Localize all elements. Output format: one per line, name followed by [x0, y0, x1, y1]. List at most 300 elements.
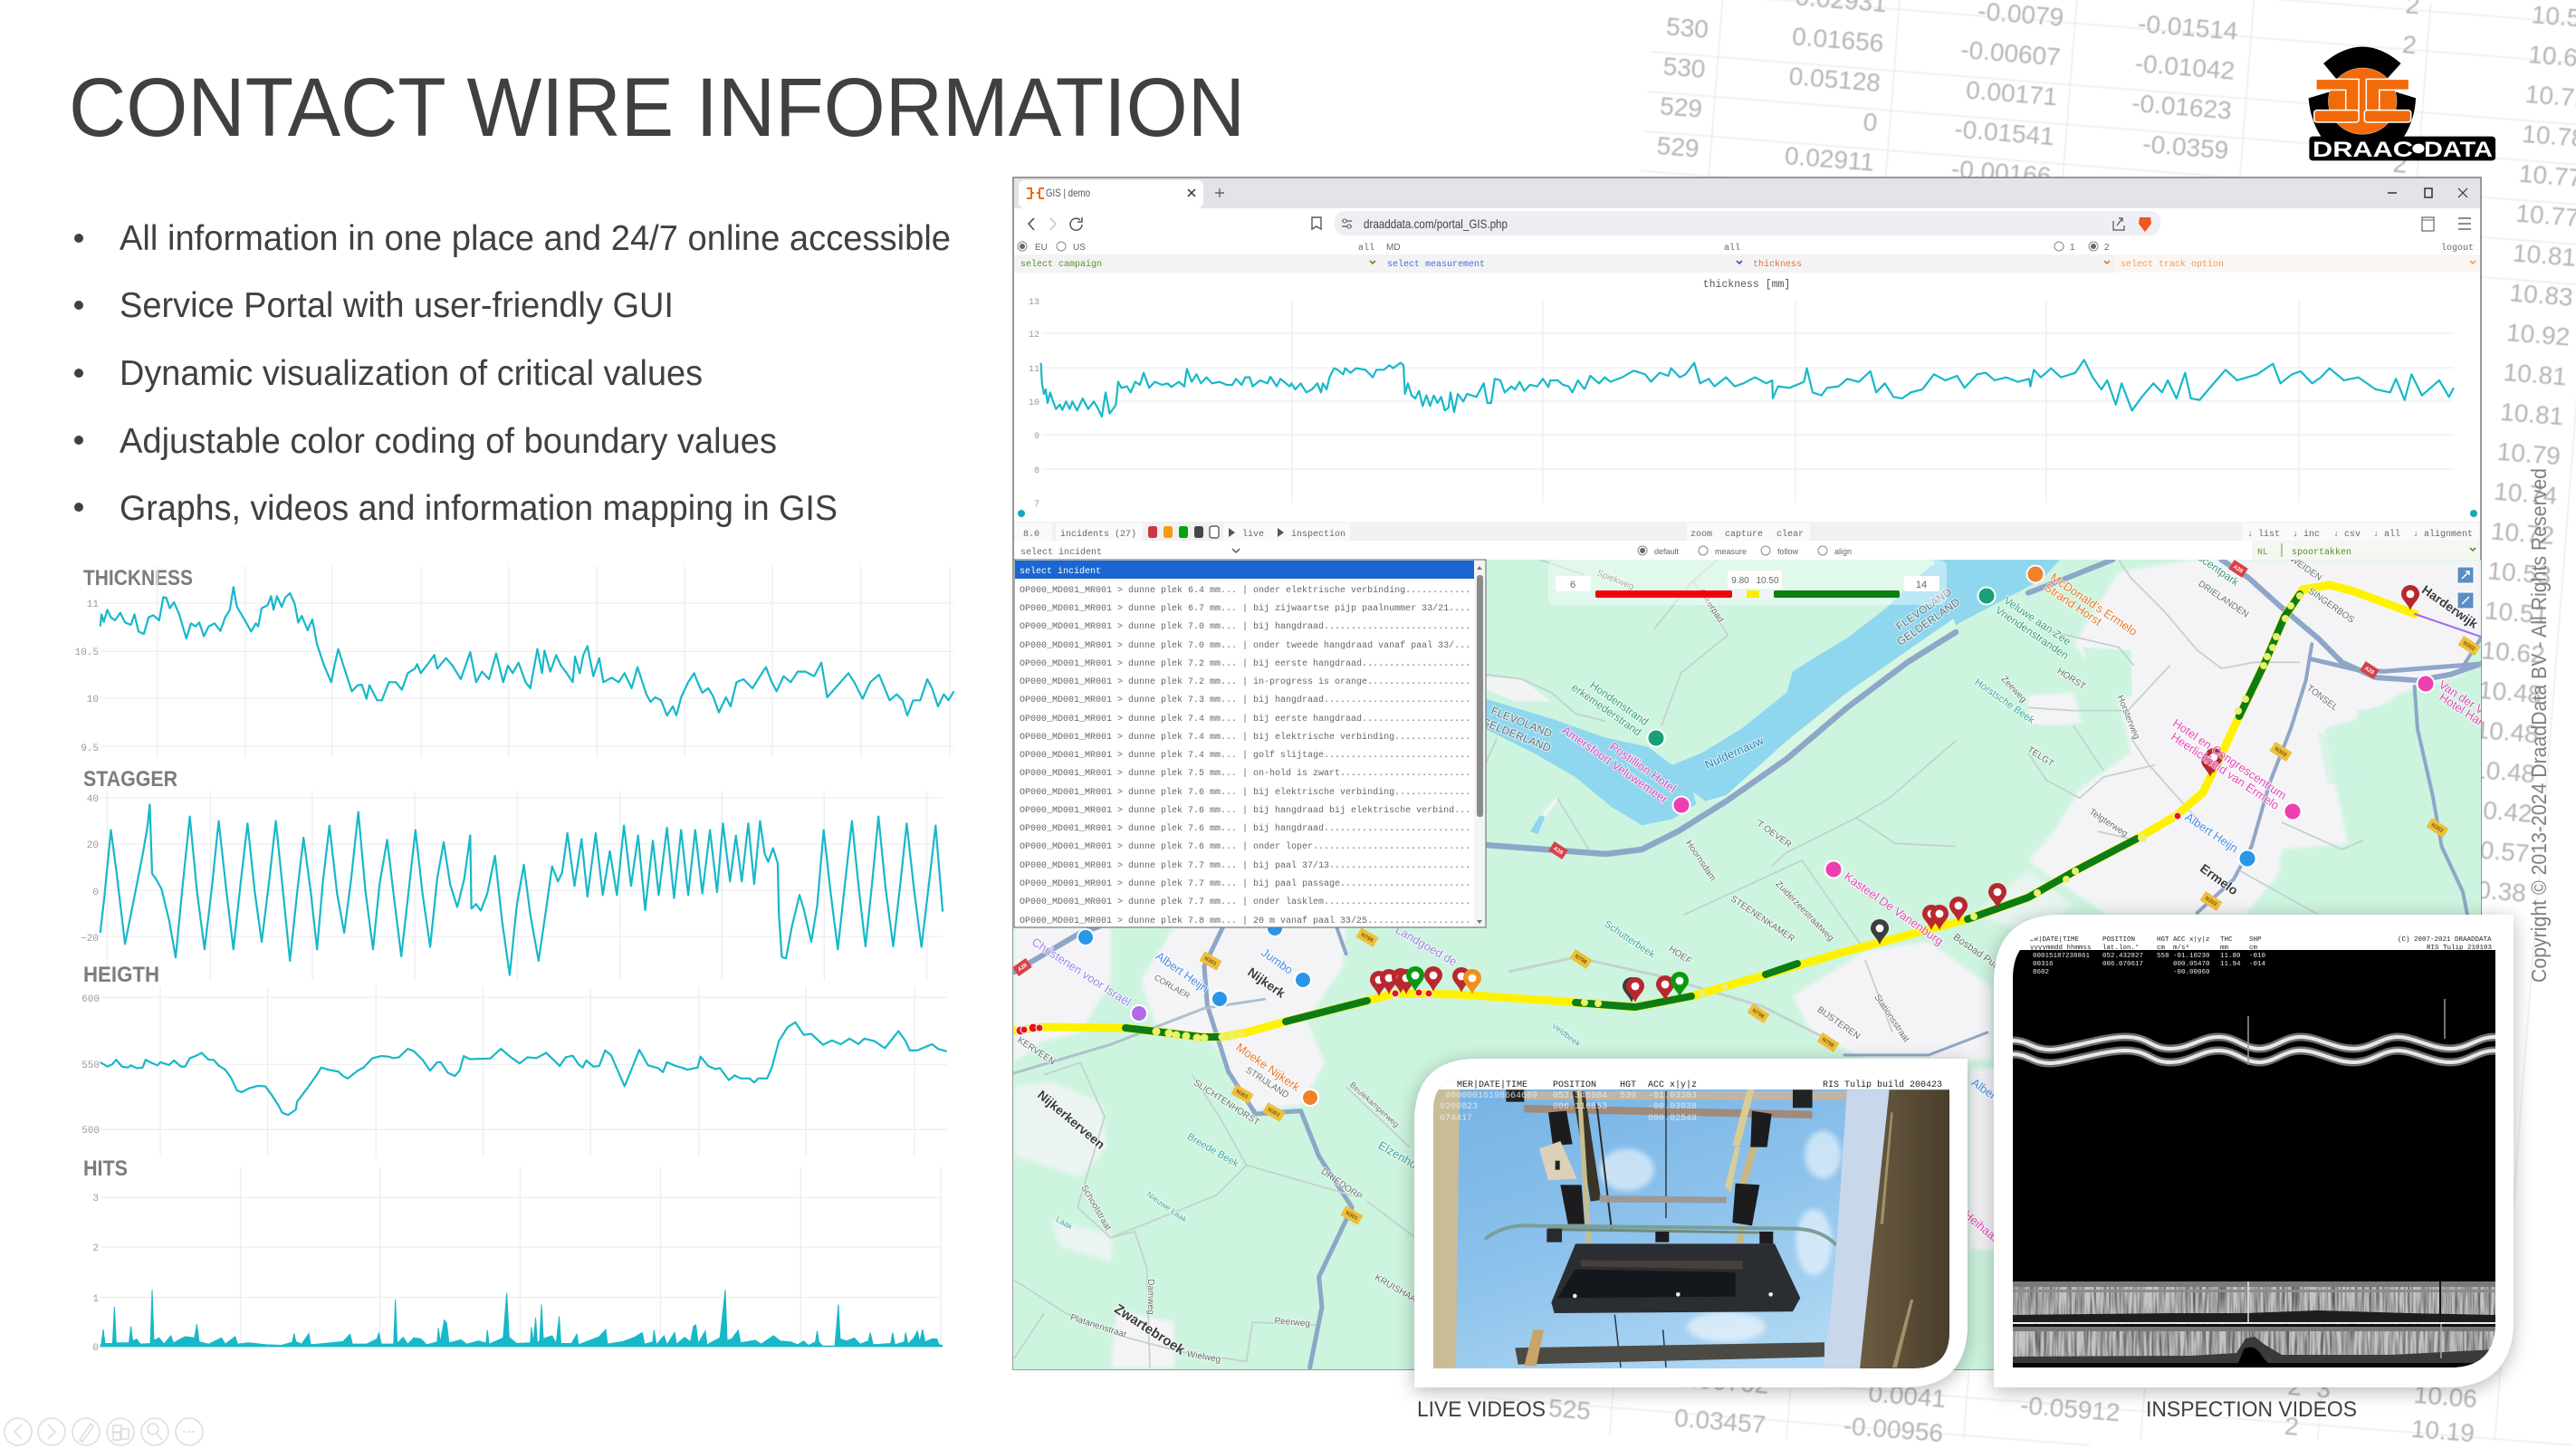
portal selector rows: US [1073, 243, 1086, 253]
map: road shields: A28 [2232, 564, 2244, 575]
toolbar: incidents and downloads: ↓ csv [2333, 530, 2361, 540]
map [1012, 542, 2517, 1369]
chart: heigth: 600 [81, 994, 100, 1005]
map: place labels: Harderwijk [2419, 582, 2481, 631]
chart: heigth: HEIGTH [83, 963, 159, 987]
dropdown rows: OP000_MD001_MR001 > dunne plek 7.2 mm... | in-progress is orange................... [1020, 677, 1470, 687]
panel: browser window [1012, 178, 2517, 1369]
contact wire waves [2013, 999, 2495, 1065]
bullet list: Adjustable color coding of boundary values [120, 422, 777, 461]
inspection video frame: 006.070617 [2102, 961, 2143, 968]
background spreadsheet: -0.01042 [2134, 49, 2236, 85]
map: place labels: Schutterbeek [1602, 918, 1657, 961]
map: place labels: Horsterweg [2115, 694, 2141, 741]
background spreadsheet: 10.57 [2465, 834, 2531, 868]
chart: main thickness graph: 12 [1029, 331, 1039, 341]
background spreadsheet: 10.81 [2503, 358, 2568, 390]
background spreadsheet: 529 [1659, 91, 1703, 123]
chart: main thickness graph: 13 [1029, 298, 1039, 308]
dropdown rows [1020, 585, 1470, 926]
chart: stagger: 0 [92, 888, 99, 898]
inspection video frame: ER|DATE|TIME [2030, 936, 2080, 944]
dropdown rows: OP000_MD001_MR001 > dunne plek 7.6 mm... | onder loper............................. [1020, 841, 1470, 852]
incident dropdown list: select incident [1020, 566, 1101, 577]
map: place labels: Wielweg [1186, 1349, 1221, 1365]
map: route line coloured by thickness [1014, 585, 2481, 1037]
map: road shields: N798 [1751, 1008, 1766, 1021]
map: place labels: Bosbad Putten [1951, 932, 2011, 978]
map: urban areas [1014, 560, 2481, 1367]
inspection video frame: 052.432827 [2102, 953, 2143, 960]
map: place labels: Peerweg [1274, 1316, 1310, 1329]
portal selector rows: select measurement [1387, 259, 1485, 270]
dropdown rows: OP000_MD001_MR001 > dunne plek 7.6 mm... | bij hangdraad........................... [1020, 823, 1470, 834]
map: place labels: HORST [2055, 667, 2087, 692]
toolbar: incidents and downloads: measure [1715, 547, 1747, 556]
toolbar: incidents and downloads: select incident [1020, 547, 1102, 558]
live video frame: POSITION [1553, 1080, 1596, 1090]
map: place labels: Hotel Harderwijk [2437, 690, 2517, 749]
background spreadsheet: 0.0041 [1867, 1379, 1947, 1413]
toolbar: incidents and downloads: clear [1776, 529, 1804, 540]
map: place labels: Nijkerkerveen [1035, 1088, 1108, 1152]
map: place labels: Nieuwe Laak [1145, 1190, 1189, 1224]
map: place labels: Christenen voor Israël [1029, 935, 1134, 1009]
background spreadsheet: 525 [1547, 1394, 1592, 1425]
presentation control icons [5, 1418, 203, 1445]
chart: heigth: 550 [81, 1060, 100, 1071]
map: road shields: N301 [1345, 1211, 1359, 1222]
map: place labels: STRIJLAND [1244, 1065, 1290, 1100]
map: place labels: Zuiderzeestraatweg [1773, 879, 1835, 944]
inspection video frame: m/s² [2173, 944, 2189, 952]
map: place labels: FLEVOLAND [1893, 585, 1954, 633]
background spreadsheet: 10.51 [2484, 596, 2549, 629]
background spreadsheet: -0.00166 [1950, 155, 2053, 190]
chart: hits: HITS [83, 1156, 128, 1181]
live video frame: -00.03938 [1648, 1102, 1697, 1112]
logo: DraadData: DRAAC [2313, 138, 2413, 162]
map: place labels [1015, 542, 2517, 1365]
map: place labels: Van der Valk [2437, 677, 2499, 725]
inspection video frame: POSITION [2102, 936, 2135, 944]
inspection video frame: 11.80 [2220, 953, 2241, 960]
live video frame: RIS Tulip build 200423 [1823, 1080, 1942, 1090]
toolbar: incidents and downloads: 8.0 [1023, 530, 1039, 540]
map: place labels: Damweg [1145, 1279, 1155, 1315]
map: points of interest [1077, 565, 2434, 1106]
background spreadsheet: 0.00702 [1677, 1364, 1770, 1399]
inspection video frame: 00316 [2033, 961, 2054, 968]
map: place labels: Laak [1055, 1214, 1075, 1232]
background spreadsheet: 10.81 [2512, 238, 2576, 272]
map: road shields: A28 [2363, 666, 2375, 677]
background spreadsheet: 10.92 [2505, 318, 2571, 351]
inspection video frame: -014 [2249, 961, 2266, 968]
map: place labels: SLICHTENHORST [1192, 1078, 1261, 1128]
chart: thickness [75, 566, 953, 758]
map: thickness range slider: 10.50 [1756, 576, 1779, 586]
map: place labels: DRIELANDEN [2197, 579, 2250, 620]
background spreadsheet: 10.42 [2468, 795, 2533, 828]
map: thickness range slider: 6 [1570, 580, 1575, 590]
background spreadsheet: 530 [1662, 52, 1707, 83]
background spreadsheet: 10.48 [2471, 755, 2536, 788]
portal selector rows: select track option [2121, 259, 2224, 270]
map: place labels: 'T OEVER [1754, 818, 1793, 850]
map: place labels: Ankerpad [1696, 587, 1725, 625]
portal selector rows: select campaign [1020, 259, 1102, 270]
toolbar: incidents and downloads: ↓ alignment [2413, 529, 2473, 540]
bullet list: Service Portal with user-friendly GUI [120, 286, 674, 325]
map: place labels: Hotel en Congrescentrum [2170, 716, 2289, 802]
background spreadsheet: 0 [1863, 108, 1879, 137]
inspection video frame: cm [2157, 945, 2166, 952]
map: place labels: Albert Heijn [1154, 949, 1211, 995]
map: lake and A28 [1485, 560, 1956, 866]
background spreadsheet: 10.38 [2462, 874, 2527, 907]
map: place labels: BIJSTEREN [1815, 1005, 1862, 1041]
toolbar: incidents and downloads: align [1834, 547, 1852, 556]
chart: hits: 1 [92, 1294, 99, 1305]
map: road shields: N302 [2430, 822, 2445, 835]
map: road shields: N798 [1821, 1037, 1835, 1050]
background spreadsheet: 10.72 [2490, 517, 2555, 550]
chart: stagger: 20 [87, 840, 99, 851]
map: road shields: N302 [2462, 640, 2476, 653]
chart: main thickness graph: 7 [1034, 500, 1039, 510]
map: place labels: Horstsche Beek [1972, 677, 2036, 726]
background spreadsheet: 10.79 [2496, 437, 2562, 470]
map: place labels: Heerlickheid van Ermelo [2169, 730, 2282, 812]
dropdown rows: OP000_MD001_MR001 > dunne plek 7.7 mm... | onder lasklem........................... [1020, 897, 1470, 907]
toolbar: incidents and downloads: follow [1777, 547, 1799, 556]
map: road shields: A28 [1017, 963, 1029, 973]
portal selector rows: thickness [1753, 259, 1802, 270]
chart: hits: 3 [92, 1194, 99, 1204]
bullet list [74, 219, 951, 528]
logo: DraadData [2309, 47, 2495, 162]
background spreadsheet: 10.81 [2499, 398, 2564, 430]
map: place labels: Veldbeek [1550, 1021, 1583, 1049]
portal selector rows: all [1724, 243, 1740, 254]
toolbar: incidents and downloads: zoom [1690, 530, 1712, 540]
background spreadsheet: 530 [1665, 12, 1709, 43]
inspection video frame: (C) 2007-2021 DRAADDATA [2398, 936, 2492, 944]
dropdown rows: OP000_MD001_MR001 > dunne plek 7.7 mm... | bij paal 37/13.......................... [1020, 860, 1470, 871]
map: place labels: HOEF [1667, 945, 1693, 966]
inspection video frame: yyyymmdd hhmmss [2030, 945, 2092, 952]
map: place labels: GELDERLAND [1480, 715, 1553, 754]
map: place labels: Zwartebroek [1111, 1301, 1188, 1358]
toolbar: incidents and downloads: inspection [1291, 529, 1345, 540]
inspection video frame: HGT [2157, 936, 2169, 944]
background spreadsheet: 0.03457 [1673, 1404, 1767, 1439]
map: place labels: KERVEEN [1015, 1035, 1057, 1067]
live video frame: 052.346984 [1553, 1091, 1607, 1101]
title: CONTACT WIRE INFORMATION [69, 62, 1245, 154]
inspection video frame: -010 [2249, 953, 2266, 960]
background spreadsheet: 2 [2287, 1372, 2303, 1401]
chart: stagger: 40 [87, 794, 99, 805]
map: incident pins [1370, 585, 2419, 1003]
dropdown rows: OP000_MD001_MR001 > dunne plek 7.4 mm... | golf slijtage........................... [1020, 750, 1470, 761]
map: east roads [2028, 560, 2481, 915]
background spreadsheet: 529 [1656, 131, 1700, 163]
background spreadsheet: -0.00956 [1843, 1411, 1944, 1447]
background spreadsheet: 0.05128 [1788, 62, 1882, 97]
portal selector rows: all [1358, 243, 1374, 254]
background spreadsheet: -0.0359 [2141, 130, 2229, 164]
toolbar: incidents and downloads: incidents (27) [1060, 529, 1136, 540]
background spreadsheet: 0.01656 [1791, 22, 1885, 57]
inspection video frame: SHP [2249, 936, 2262, 944]
portal selector rows [1014, 242, 2480, 273]
background spreadsheet: 2 [2284, 1412, 2300, 1441]
browser toolbar: draaddata.com/portal_GIS.php [1364, 216, 1508, 231]
chart: stagger [81, 767, 943, 981]
chart: thickness: 10.5 [75, 648, 99, 658]
map: place labels: Landgoed de [1393, 923, 1460, 969]
inspection video frame [2013, 934, 2495, 1367]
toolbar: incidents and downloads: NL [2257, 548, 2268, 558]
map: place labels: Hondenstrand [1587, 678, 1651, 728]
map: place labels: McDonald's Ermelo [2048, 571, 2140, 638]
map: route markers [1016, 592, 2303, 1041]
map: place labels: Moeke Nijkerk [1234, 1041, 1303, 1094]
map: place labels: Vriendenstranden [1993, 604, 2071, 662]
toolbar: incidents and downloads [1014, 522, 2480, 560]
map: place labels: Veluwe aan Zee [2002, 594, 2073, 648]
chart: main thickness graph: 10 [1029, 398, 1039, 408]
chart: main thickness graph: 11 [1029, 365, 1039, 375]
live video frame: HGT [1620, 1080, 1636, 1090]
map: place labels: Nuldernauw [1702, 734, 1766, 772]
map: thickness range slider: 9.80 [1731, 576, 1749, 586]
map: place labels: Jumbo [1259, 945, 1296, 977]
inspection video frame: ACC x|y|z [2173, 936, 2210, 944]
toolbar: incidents and downloads: default [1654, 547, 1680, 556]
inspection video frame: 000.05470 [2173, 961, 2210, 968]
dropdown rows: OP000_MD001_MR001 > dunne plek 6.4 mm... | onder elektrische verbinding............ [1020, 585, 1470, 596]
map: place labels: erkemederstrand [1569, 681, 1643, 738]
map: road shields: N798 [1360, 933, 1374, 944]
map: place labels: DRIEDORP [1319, 1166, 1364, 1203]
wire wear strip [2013, 1281, 2495, 1367]
chart: main thickness graph: 9 [1034, 432, 1039, 442]
chart: hits: 2 [92, 1243, 99, 1254]
background spreadsheet: -0.00607 [1959, 35, 2062, 72]
map: road shields: N303 [2274, 746, 2288, 759]
inspection video frame: cm [2249, 945, 2258, 952]
map: place labels: WEIDEN [2288, 554, 2323, 583]
chart: main thickness graph: thickness [mm] [1703, 279, 1790, 291]
background spreadsheet: -0.05912 [2019, 1391, 2121, 1426]
map: place labels: TELGT [2025, 745, 2055, 769]
toolbar: incidents and downloads: live [1242, 529, 1264, 540]
dropdown rows: OP000_MD001_MR001 > dunne plek 7.6 mm... | bij hangdraad bij elektrische verbind... [1020, 805, 1470, 816]
map: thickness range slider: 14 [1916, 580, 1927, 590]
map: place labels: TONSEL [2304, 684, 2340, 714]
chart: hits [83, 1156, 942, 1354]
background spreadsheet: 10.19 [2410, 1415, 2475, 1447]
dropdown rows: OP000_MD001_MR001 > dunne plek 7.4 mm... | bij eerste hangdraad.................... [1020, 714, 1470, 724]
inspection video frame: RIS Tulip 210103 [2427, 945, 2493, 952]
map: place labels: Elzenhof [1376, 1138, 1422, 1173]
inspection video frame: -00.00060 [2173, 969, 2210, 976]
background spreadsheet: 10.62 [2480, 636, 2546, 669]
dropdown rows: OP000_MD001_MR001 > dunne plek 7.0 mm... | onder tweede hangdraad vanaf paal 33/... [1020, 640, 1470, 651]
map: place labels: GELDERLAND [1894, 595, 1962, 648]
map: place labels: SINGERBOS [2306, 586, 2356, 626]
portal selector rows: MD [1386, 243, 1401, 253]
dropdown rows: OP000_MD001_MR001 > dunne plek 6.7 mm... | bij zijwaartse pijp paalnummer 33/21.... [1020, 603, 1470, 614]
map: central roads [1485, 860, 1987, 1204]
chart: main thickness graph: 8 [1034, 466, 1039, 476]
chart: heigth [81, 963, 947, 1156]
map: place labels: Platanenstraat [1068, 1312, 1127, 1340]
portal selector rows: 2 [2104, 243, 2110, 253]
background spreadsheet: 0.02911 [1784, 141, 1875, 177]
chart: thickness: 11 [87, 600, 99, 610]
inspection video frame: THC [2220, 936, 2233, 944]
chart: stagger: STAGGER [83, 767, 177, 792]
map: road shields: A28 [1552, 846, 1564, 857]
map: thickness range slider [1548, 560, 1947, 605]
map: place labels: Strand Horst [2042, 581, 2104, 629]
background spreadsheet [1483, 0, 2576, 1449]
map: place labels: Beulekamperweg [1348, 1080, 1401, 1129]
background spreadsheet: 2 [2401, 30, 2418, 59]
inspection video frame: lat.lon.° [2102, 944, 2140, 952]
inspection video frame: 8602 [2033, 969, 2049, 976]
map: place labels: Spiekweg [1595, 568, 1635, 592]
inspection video frame: 00015187238861 [2033, 953, 2091, 960]
background spreadsheet: -0.01623 [2131, 89, 2233, 125]
background spreadsheet: 0.00171 [1965, 76, 2058, 110]
portal selector rows: logout [2441, 243, 2474, 254]
map: place labels: Postillion Hotel [1607, 740, 1679, 795]
map: road shields: N301 [1235, 1089, 1250, 1100]
map: road shields: N301 [1267, 1108, 1281, 1118]
inspection video frame: mm [2220, 945, 2229, 952]
live video frame: 00000016198664669 [1445, 1091, 1537, 1101]
background spreadsheet: 2 [2392, 149, 2408, 178]
background spreadsheet: -0.01514 [2137, 9, 2239, 45]
toolbar: incidents and downloads: ↓ list [2247, 529, 2280, 540]
inspection video frame: -01.10230 [2173, 953, 2210, 960]
map: place labels: Zeeweg [1999, 675, 2028, 705]
background spreadsheet: 10.83 [2509, 278, 2574, 312]
bullet list: Dynamic visualization of critical values [120, 354, 703, 393]
portal selector rows: 1 [2070, 243, 2075, 253]
live video frame: ACC x|y|z [1648, 1080, 1697, 1090]
map: place labels: Albert Heijn [2182, 810, 2241, 855]
map: place labels: Heihaas [1961, 1207, 2003, 1246]
background spreadsheet: 10.06 [2413, 1380, 2478, 1413]
live video frame: MER|DATE|TIME [1457, 1080, 1527, 1090]
caption: inspection videos: INSPECTION VIDEOS [2146, 1397, 2357, 1422]
map: place labels: FLEVOLAND [1489, 704, 1555, 740]
live video frame: 074417 [1440, 1114, 1472, 1124]
chart: hits: 0 [92, 1343, 99, 1354]
map: road shields: N301 [1203, 956, 1218, 967]
chart: thickness: THICKNESS [83, 566, 193, 590]
inspection video frame: 558 [2157, 953, 2169, 960]
logo: DraadData: DATA [2424, 138, 2493, 162]
live video frame: 539 [1620, 1091, 1636, 1101]
dropdown rows: OP000_MD001_MR001 > dunne plek 7.2 mm... | bij eerste hangdraad.................... [1020, 658, 1470, 669]
chart: thickness: 10 [87, 695, 99, 705]
map: road shields: N303 [2204, 896, 2218, 908]
panel: live video card [1414, 1059, 1968, 1387]
map: west roads [1014, 926, 1415, 1367]
dropdown rows: OP000_MD001_MR001 > dunne plek 7.4 mm... | bij elektrische verbinding.............. [1020, 732, 1470, 743]
background spreadsheet: -0.01541 [1953, 115, 2055, 150]
live video frame: 006.116853 [1553, 1102, 1607, 1112]
dropdown rows: OP000_MD001_MR001 > dunne plek 7.5 mm... | on-hold is zwart........................ [1020, 768, 1470, 779]
browser tab bar: GIS | demo [1046, 187, 1090, 199]
toolbar: incidents and downloads: ↓ all [2373, 529, 2400, 540]
live video frame: -01.03383 [1648, 1091, 1697, 1101]
live video frame: 0200823 [1440, 1102, 1478, 1112]
background spreadsheet: 10.53 [2486, 556, 2552, 590]
toolbar: incidents and downloads: spoortakken [2292, 547, 2351, 558]
copyright: Copyright © 2013-2024 DraadData BV - All Rights Reserved [2527, 468, 2551, 983]
chart: thickness: 9.5 [81, 744, 99, 754]
map: place labels: CORLAER [1153, 973, 1192, 1001]
panel: inspection video card [1994, 915, 2514, 1387]
portal selector rows: EU [1035, 243, 1048, 253]
map: place labels: Albert [1968, 1075, 2002, 1104]
map: green park inclusions [2028, 648, 2406, 789]
chart: stagger: −20 [81, 934, 99, 945]
dropdown rows: OP000_MD001_MR001 > dunne plek 7.3 mm... | bij hangdraad........................... [1020, 695, 1470, 705]
chart: heigth: 500 [81, 1126, 100, 1137]
map: road shields: N798 [1574, 954, 1588, 966]
map: place labels: Breede Beek [1185, 1131, 1240, 1170]
map: place labels: STEENENKAMER [1729, 894, 1796, 945]
map: place labels: Telgterweg [2087, 807, 2130, 840]
map: place labels: Kasteel De Vanenburg [1842, 869, 1946, 948]
live video frame: 000.02549 [1648, 1114, 1697, 1124]
map: place labels: Stationsstraat [1872, 993, 1911, 1044]
dropdown rows: OP000_MD001_MR001 > dunne plek 7.6 mm... | bij elektrische verbinding.............. [1020, 787, 1470, 798]
background spreadsheet: 10.74 [2493, 477, 2559, 510]
dropdown rows: OP000_MD001_MR001 > dunne plek 7.7 mm... | bij paal passage........................ [1020, 878, 1470, 889]
toolbar: incidents and downloads: capture [1725, 530, 1763, 540]
map: place labels: Nijkerk [1245, 964, 1288, 1001]
chart: main thickness graph [1018, 279, 2477, 517]
browser toolbar [1014, 208, 2480, 238]
incident dropdown list [1014, 560, 1486, 927]
dropdown rows: OP000_MD001_MR001 > dunne plek 7.0 mm... | bij hangdraad........................... [1020, 621, 1470, 632]
background spreadsheet: 10.48 [2477, 676, 2542, 708]
map: road shields [1012, 560, 2480, 1225]
map: zoom controls [2457, 567, 2474, 609]
inspection video frame: 11.94 [2220, 961, 2241, 968]
map: place labels: Ermelo [2198, 861, 2241, 897]
map: place labels: Amersfoort Veluwemeer [1559, 723, 1671, 807]
bullet list: Graphs, videos and information mapping in GIS [120, 489, 838, 528]
map: place labels: Schoolstraat [1079, 1184, 1113, 1233]
browser tab bar [1014, 178, 2480, 208]
background spreadsheet: 3 [2315, 1374, 2332, 1404]
map: place labels: Crescentpark [2181, 542, 2242, 589]
background spreadsheet: 10.48 [2475, 715, 2540, 748]
toolbar: incidents and downloads: ↓ inc [2293, 529, 2320, 540]
map: place labels: Hoornsdam [1683, 839, 1718, 883]
